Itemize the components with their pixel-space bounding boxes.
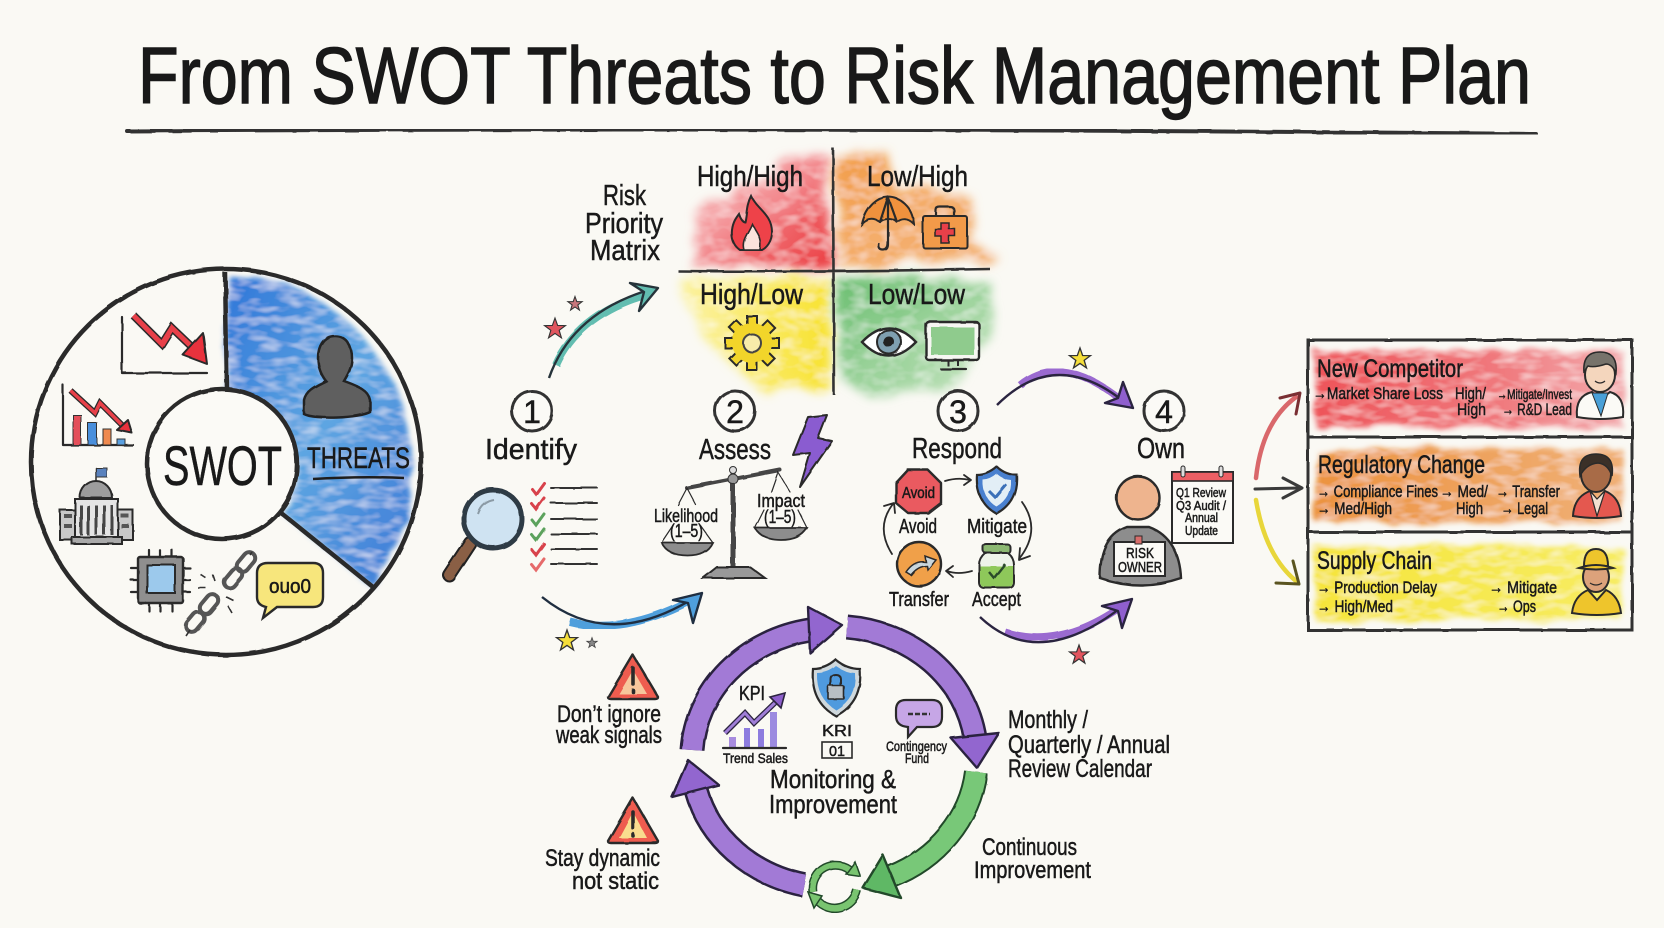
threats wedge	[227, 274, 412, 585]
row: regulatory change: → Transfer	[1496, 482, 1560, 501]
panel: SWOT wheel	[31, 269, 421, 655]
matrix title: Priority	[585, 208, 663, 240]
star: dark pink	[568, 296, 582, 310]
star: red	[545, 318, 565, 338]
icon: risk owner: OWNER	[1118, 559, 1162, 576]
icon: doctor	[1577, 352, 1623, 419]
icon: avoid stop sign	[896, 470, 941, 513]
icon: KPI chart	[723, 693, 786, 748]
cycle arrow: green	[863, 772, 976, 898]
icon: speech bubble	[257, 563, 323, 618]
row: new competitor: → R&D Lead	[1502, 400, 1572, 419]
icon: lawyer	[1573, 454, 1621, 518]
row: regulatory change: → Med/High	[1317, 499, 1392, 518]
icon: monitor	[926, 322, 979, 369]
note: don't ignore weak signals	[555, 701, 662, 749]
icon: transfer circle	[897, 542, 941, 586]
arrow: respond to own, top	[997, 371, 1133, 408]
icon: construction worker	[1572, 549, 1621, 615]
icon: mitigate shield	[977, 467, 1017, 514]
note: review calendar	[1008, 706, 1170, 783]
star: yellow top	[1070, 348, 1090, 368]
note: stay dynamic not static: not static	[572, 868, 659, 895]
row: new competitor: →Mitigate/Invest	[1497, 386, 1572, 402]
icon: risk owner: RISK	[1126, 545, 1154, 562]
KRI box: KRI	[822, 723, 852, 740]
icon: gear	[725, 316, 779, 370]
note: continuous improvement	[974, 834, 1091, 884]
arrow: respond to own, bottom	[980, 599, 1132, 642]
label: likelihood: (1–5)	[670, 521, 703, 541]
label: respond: Respond	[912, 433, 1002, 465]
note: continuous improvement: Continuous	[982, 834, 1077, 861]
step number 4	[1144, 391, 1184, 431]
icon: recycle arrows	[808, 862, 860, 908]
label: low/low: Low/Low	[868, 279, 966, 311]
arrow: identify to assess	[542, 593, 702, 626]
matrix title: Risk	[603, 180, 646, 212]
icon: review calendar	[1172, 466, 1233, 543]
step number 4: 4	[1155, 394, 1173, 430]
center label SWOT: SWOT	[163, 434, 282, 497]
icon: magnifying glass	[449, 490, 522, 575]
label: likelihood	[654, 506, 718, 541]
table frame	[1308, 340, 1632, 630]
label: contingency fund: Contingency	[886, 738, 947, 754]
icon: review calendar: Annual	[1185, 510, 1218, 525]
process step 2: assess	[654, 391, 832, 578]
cycle arrow: upper right purple	[847, 627, 999, 768]
icon: first aid kit	[923, 207, 967, 248]
icon: review calendar: Update	[1185, 523, 1218, 538]
label: accept: Accept	[972, 589, 1021, 611]
icon: threat person	[304, 336, 370, 418]
arrow: identify to matrix	[549, 283, 658, 378]
row: regulatory change: Regulatory Change	[1318, 451, 1485, 479]
row: new competitor: High/	[1455, 384, 1486, 403]
label: contingency fund	[886, 738, 947, 766]
panel: threat register table	[1308, 340, 1632, 630]
cycle arrow: lower left purple	[672, 760, 804, 885]
icon: falling bar chart	[63, 385, 133, 445]
matrix quadrant: low/low wash	[838, 276, 992, 396]
row wash: supply chain	[1315, 546, 1622, 620]
row wash: new competitor	[1315, 351, 1623, 427]
icon: lock shield	[813, 660, 860, 716]
label: own: Own	[1137, 433, 1185, 465]
arrow: own to threat register, dark	[1255, 478, 1302, 498]
icon: balance scale	[662, 466, 807, 578]
row: regulatory change: → Med/	[1440, 482, 1488, 501]
row: new competitor: →Market Share Loss	[1313, 384, 1443, 403]
star: small gray	[587, 638, 597, 647]
step number 2: 2	[726, 394, 744, 430]
panel: monitoring and improvement cycle	[672, 607, 1170, 908]
icon: warning triangle, weak signals	[608, 655, 658, 699]
label: assess: Assess	[699, 434, 771, 466]
row: regulatory change: → Legal	[1501, 499, 1548, 518]
row wash: regulatory change	[1315, 449, 1622, 523]
label: impact: Impact	[757, 491, 805, 511]
note: continuous improvement: Improvement	[974, 857, 1091, 884]
matrix title: Matrix	[590, 235, 660, 267]
note: stay dynamic not static	[545, 845, 660, 895]
threats label: THREATS	[307, 442, 410, 475]
icon: lightning bolt	[793, 415, 832, 487]
icon: eye	[862, 328, 916, 356]
note: review calendar: Review Calendar	[1008, 755, 1152, 783]
row: regulatory change: → Compliance Fines	[1317, 482, 1438, 501]
row: supply chain: → Production Delay	[1317, 578, 1437, 597]
KPI label: KPI	[739, 683, 765, 705]
icon: review calendar: Q3 Audit /	[1176, 498, 1226, 513]
label: high/high: High/High	[697, 161, 803, 193]
note: review calendar: Monthly /	[1008, 706, 1088, 734]
step number 3	[938, 391, 978, 431]
step number 3: 3	[949, 394, 967, 430]
row: new competitor: High	[1457, 400, 1486, 419]
row: supply chain: → Mitigate	[1489, 578, 1557, 597]
label: impact	[757, 491, 805, 527]
label: high/low: High/Low	[700, 279, 804, 311]
row: new competitor	[1313, 355, 1572, 419]
step number 1	[512, 391, 552, 431]
arrow: own to threat register, yellow	[1256, 500, 1299, 584]
label: avoid: Avoid	[899, 516, 937, 538]
process step 1: identify	[449, 391, 597, 575]
row: new competitor: New Competitor	[1317, 355, 1463, 383]
icon: checklist	[532, 483, 597, 570]
matrix quadrant: high/low wash	[680, 276, 830, 390]
icon: speech bubble: ouo0	[269, 576, 311, 598]
label: low/high: Low/High	[867, 161, 968, 193]
icon: warning triangle, stay dynamic	[608, 798, 658, 843]
KRI box: 01	[829, 743, 845, 760]
icon: flame	[732, 196, 772, 250]
icon: avoid stop sign: Avoid	[902, 485, 935, 502]
note: don't ignore weak signals: Don’t ignore	[557, 701, 661, 728]
label: mitigate: Mitigate	[967, 516, 1027, 538]
icon: contingency bubble	[896, 700, 942, 737]
matrix quadrant: high/high wash	[690, 155, 830, 266]
label: identify: Identify	[485, 434, 577, 466]
cycle arrow: upper left purple	[692, 607, 842, 750]
response cycle arrows	[884, 475, 1031, 577]
icon: review calendar: Q1 Review	[1176, 485, 1226, 500]
row: regulatory change	[1317, 451, 1560, 518]
row: supply chain: → Ops	[1497, 597, 1536, 616]
KRI box	[822, 723, 852, 760]
cycle center heading	[769, 764, 898, 819]
row: supply chain	[1317, 547, 1557, 616]
label: contingency fund: Fund	[905, 750, 929, 766]
star: red bottom	[1070, 645, 1088, 663]
icon: government building	[60, 468, 133, 544]
cycle center heading: Improvement	[769, 789, 898, 819]
panel: risk priority matrix	[585, 148, 1000, 396]
row: supply chain: Supply Chain	[1317, 547, 1432, 575]
icon: risk owner	[1100, 476, 1181, 585]
note: review calendar: Quarterly / Annual	[1008, 731, 1170, 759]
row: supply chain: → High/Med	[1317, 597, 1393, 616]
label: impact: (1–5)	[764, 507, 796, 527]
threats underline	[313, 477, 404, 479]
label: transfer: Transfer	[889, 589, 949, 611]
cycle center heading: Monitoring &	[770, 764, 896, 794]
matrix title	[585, 180, 663, 267]
row: regulatory change: High	[1456, 499, 1483, 518]
arrow: own to threat register, red	[1256, 393, 1300, 478]
wheel outlines	[31, 269, 421, 655]
step number 2	[715, 391, 755, 431]
icon: falling line chart	[122, 315, 207, 373]
note: stay dynamic not static: Stay dynamic	[545, 845, 660, 872]
note: don't ignore weak signals: weak signals	[555, 722, 662, 749]
step number 1: 1	[523, 394, 541, 430]
star: yellow	[557, 630, 577, 650]
icon: umbrella	[862, 197, 914, 250]
KPI caption: Trend Sales	[723, 750, 788, 766]
icon: broken chain	[183, 550, 258, 636]
process step 3: respond	[884, 391, 1031, 611]
title underline	[127, 130, 1536, 134]
label: likelihood: Likelihood	[654, 506, 718, 526]
icon: accept jar	[979, 544, 1014, 588]
icon: microchip	[131, 550, 190, 611]
process step 4: own	[1100, 391, 1233, 585]
matrix quadrant: low/high wash	[838, 150, 1000, 266]
